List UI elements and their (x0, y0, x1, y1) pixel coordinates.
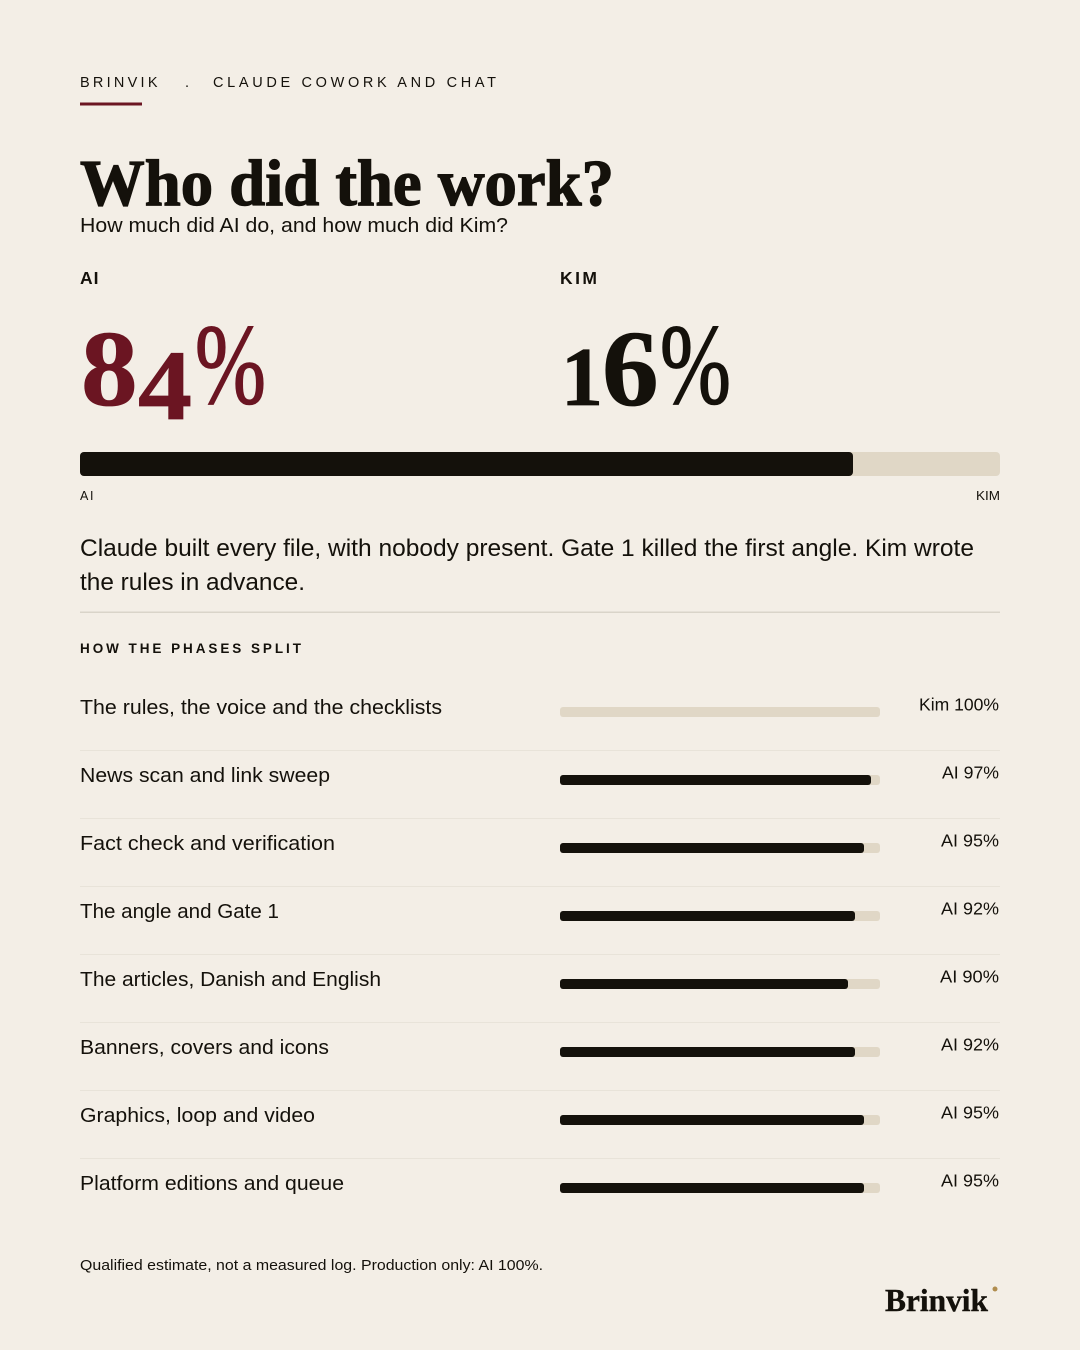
row: graphics: Graphics, loop and video (80, 1104, 315, 1127)
overall split bar (80, 452, 1000, 476)
accent rule (80, 102, 142, 106)
row: banners: Banners, covers and icons (80, 1036, 329, 1059)
row: articles: AI 90% (940, 966, 999, 986)
header eyebrow: . (185, 75, 189, 91)
row: angle (80, 898, 999, 923)
bar label AI: AI (80, 489, 94, 503)
row: angle: AI 92% (941, 898, 999, 918)
title: Who did the work? (80, 147, 614, 220)
summary paragraph: Claude built every file, with nobody present. Gate 1 killed the first angle. Kim wrote (80, 535, 974, 562)
row: articles (80, 966, 999, 991)
row: news scan: News scan and link sweep (80, 764, 330, 787)
row: graphics (80, 1102, 999, 1127)
Kim value: 6 (602, 308, 659, 428)
row: platform: Platform editions and queue (80, 1172, 344, 1195)
row: graphics: AI 95% (941, 1102, 999, 1122)
AI value: 8 (81, 308, 138, 428)
AI value: % (195, 301, 266, 428)
row: news scan (80, 762, 999, 787)
header eyebrow: BRINVIK (80, 75, 158, 91)
Kim value: 1 (561, 331, 603, 424)
bar label Kim: KIM (976, 489, 1000, 503)
Kim value: % (660, 301, 731, 428)
section heading: HOW THE PHASES SPLIT (80, 641, 302, 656)
row: banners (80, 1034, 999, 1059)
row: platform: AI 95% (941, 1170, 999, 1190)
brand logo: Brinvik (885, 1282, 988, 1318)
row: fact check: Fact check and verification (80, 832, 335, 855)
header eyebrow: CLAUDE COWORK AND CHAT (213, 75, 496, 91)
summary paragraph (80, 535, 974, 596)
AI value (81, 301, 266, 441)
row: banners: AI 92% (941, 1034, 999, 1054)
row: news scan: AI 97% (942, 762, 999, 782)
row: rules: Kim 100% (919, 694, 999, 714)
row: platform (80, 1170, 999, 1195)
AI value: 4 (138, 330, 192, 441)
Kim stat (560, 268, 731, 428)
AI stat (80, 268, 266, 441)
row: fact check (80, 830, 999, 855)
subtitle: How much did AI do, and how much did Kim? (80, 214, 508, 237)
row: articles: The articles, Danish and English (80, 968, 381, 991)
phase rows (80, 694, 1000, 1195)
row: rules: The rules, the voice and the checklists (80, 696, 442, 719)
row: rules (80, 694, 999, 719)
row: fact check: AI 95% (941, 830, 999, 850)
AI label: AI (80, 268, 98, 288)
summary paragraph: the rules in advance. (80, 569, 305, 596)
Kim label: KIM (560, 268, 597, 288)
Kim value (561, 301, 731, 428)
footnote: Qualified estimate, not a measured log. Production only: AI 100%. (80, 1257, 543, 1274)
row: angle: The angle and Gate 1 (80, 900, 279, 923)
header eyebrow (80, 75, 496, 91)
